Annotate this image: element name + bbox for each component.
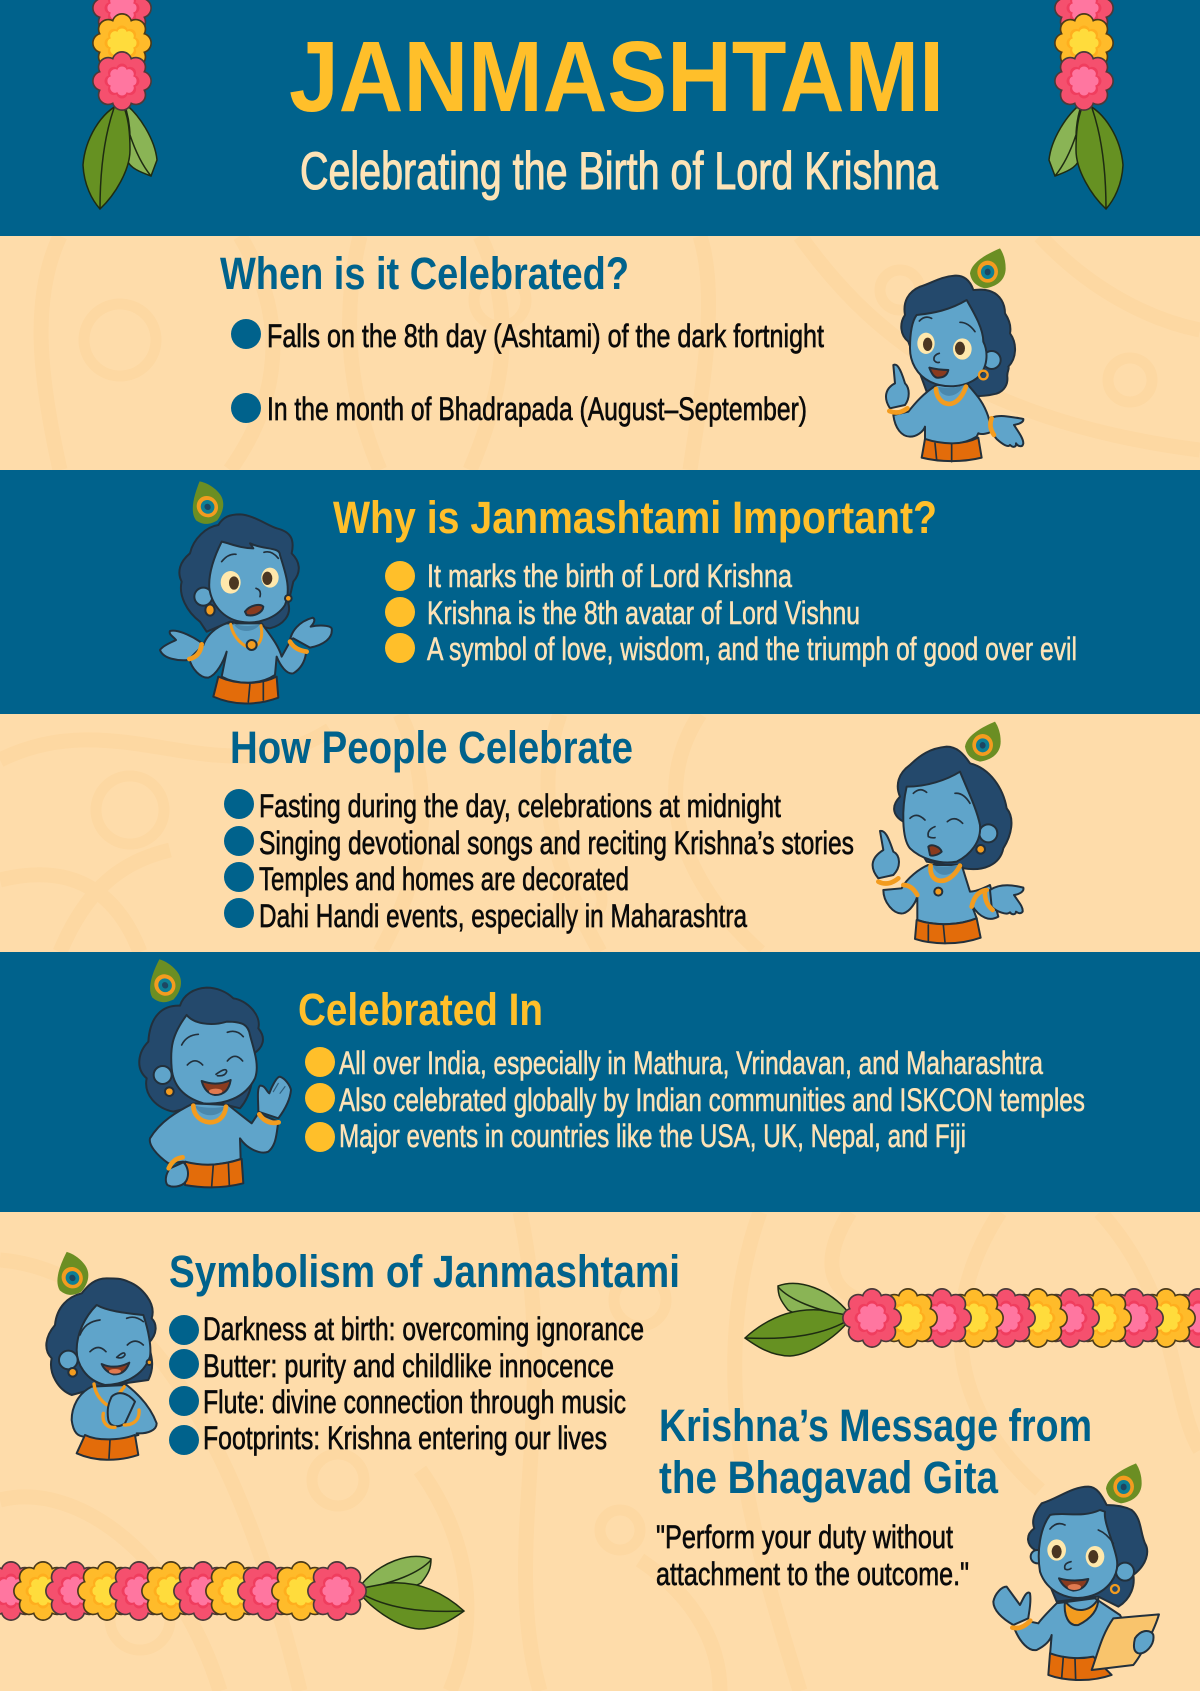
- bullet item 2: Butter: purity and childlike innocence: [203, 1348, 614, 1384]
- panel: why is janmashtami important: [333, 492, 1077, 667]
- heading: krishna's message: [659, 1400, 1092, 1503]
- bullet item 4: Footprints: Krishna entering our lives: [203, 1420, 607, 1456]
- bullet item 3: Flute: divine connection through music: [203, 1384, 626, 1420]
- icon: krishna praying: [44, 1248, 157, 1460]
- panel: why important band: [0, 470, 1200, 714]
- bullet item 3: Major events in countries like the USA, UK, Nepal, and Fiji: [339, 1118, 966, 1154]
- bullet item 2: Singing devotional songs and reciting Krishna’s stories: [259, 825, 854, 861]
- bullet item 2: In the month of Bhadrapada (August–September): [267, 391, 807, 427]
- bullet item 1: Falls on the 8th day (Ashtami) of the dark fortnight: [267, 318, 824, 354]
- bullet item 4: Dahi Handi events, especially in Maharashtra: [259, 898, 748, 934]
- bullet item 3: Temples and homes are decorated: [259, 861, 629, 897]
- icon: krishna pointing: [886, 248, 1023, 462]
- panel: header band: [0, 0, 1200, 236]
- icon: top right garland: [745, 1284, 1200, 1356]
- bullet item 1: Fasting during the day, celebrations at midnight: [259, 788, 781, 824]
- bullet item 1: Darkness at birth: overcoming ignorance: [203, 1311, 644, 1347]
- quote text: [656, 1519, 969, 1592]
- icon: krishna holding scroll: [993, 1463, 1159, 1680]
- icon: krishna singing: [873, 722, 1023, 943]
- panel: when is it celebrated: [220, 248, 824, 427]
- subtitle: Celebrating the Birth of Lord Krishna: [300, 142, 938, 201]
- panel: krishna's message: [656, 1400, 1092, 1592]
- bullet item 2: Krishna is the 8th avatar of Lord Vishnu: [427, 595, 860, 631]
- quote text: "Perform your duty without: [656, 1519, 953, 1555]
- panel: celebrated in: [298, 984, 1085, 1154]
- heading: krishna's message: Krishna’s Message from: [659, 1400, 1092, 1451]
- heading: krishna's message: the Bhagavad Gita: [659, 1452, 999, 1503]
- icon: krishna shrugging: [160, 477, 332, 704]
- bullet item 1: It marks the birth of Lord Krishna: [427, 558, 793, 594]
- icon: right hanging garland: [1049, 0, 1123, 209]
- panel: how people celebrate: [224, 722, 854, 934]
- panel: celebrated in band: [0, 952, 1200, 1212]
- heading: celebrated in: Celebrated In: [298, 984, 543, 1035]
- bullet item 3: [224, 861, 629, 897]
- heading: why: Why is Janmashtami Important?: [333, 492, 937, 543]
- icon: krishna waving: [136, 956, 291, 1187]
- quote text: attachment to the outcome.": [656, 1556, 969, 1592]
- heading: how: How People Celebrate: [230, 722, 633, 773]
- heading: when: When is it Celebrated?: [220, 248, 629, 299]
- icon: left hanging garland: [83, 0, 157, 209]
- title: JANMASHTAMI: [289, 21, 944, 133]
- panel: symbolism of janmashtami: [169, 1246, 680, 1456]
- icon: bottom left garland: [0, 1557, 464, 1629]
- heading: symbolism: Symbolism of Janmashtami: [169, 1246, 680, 1297]
